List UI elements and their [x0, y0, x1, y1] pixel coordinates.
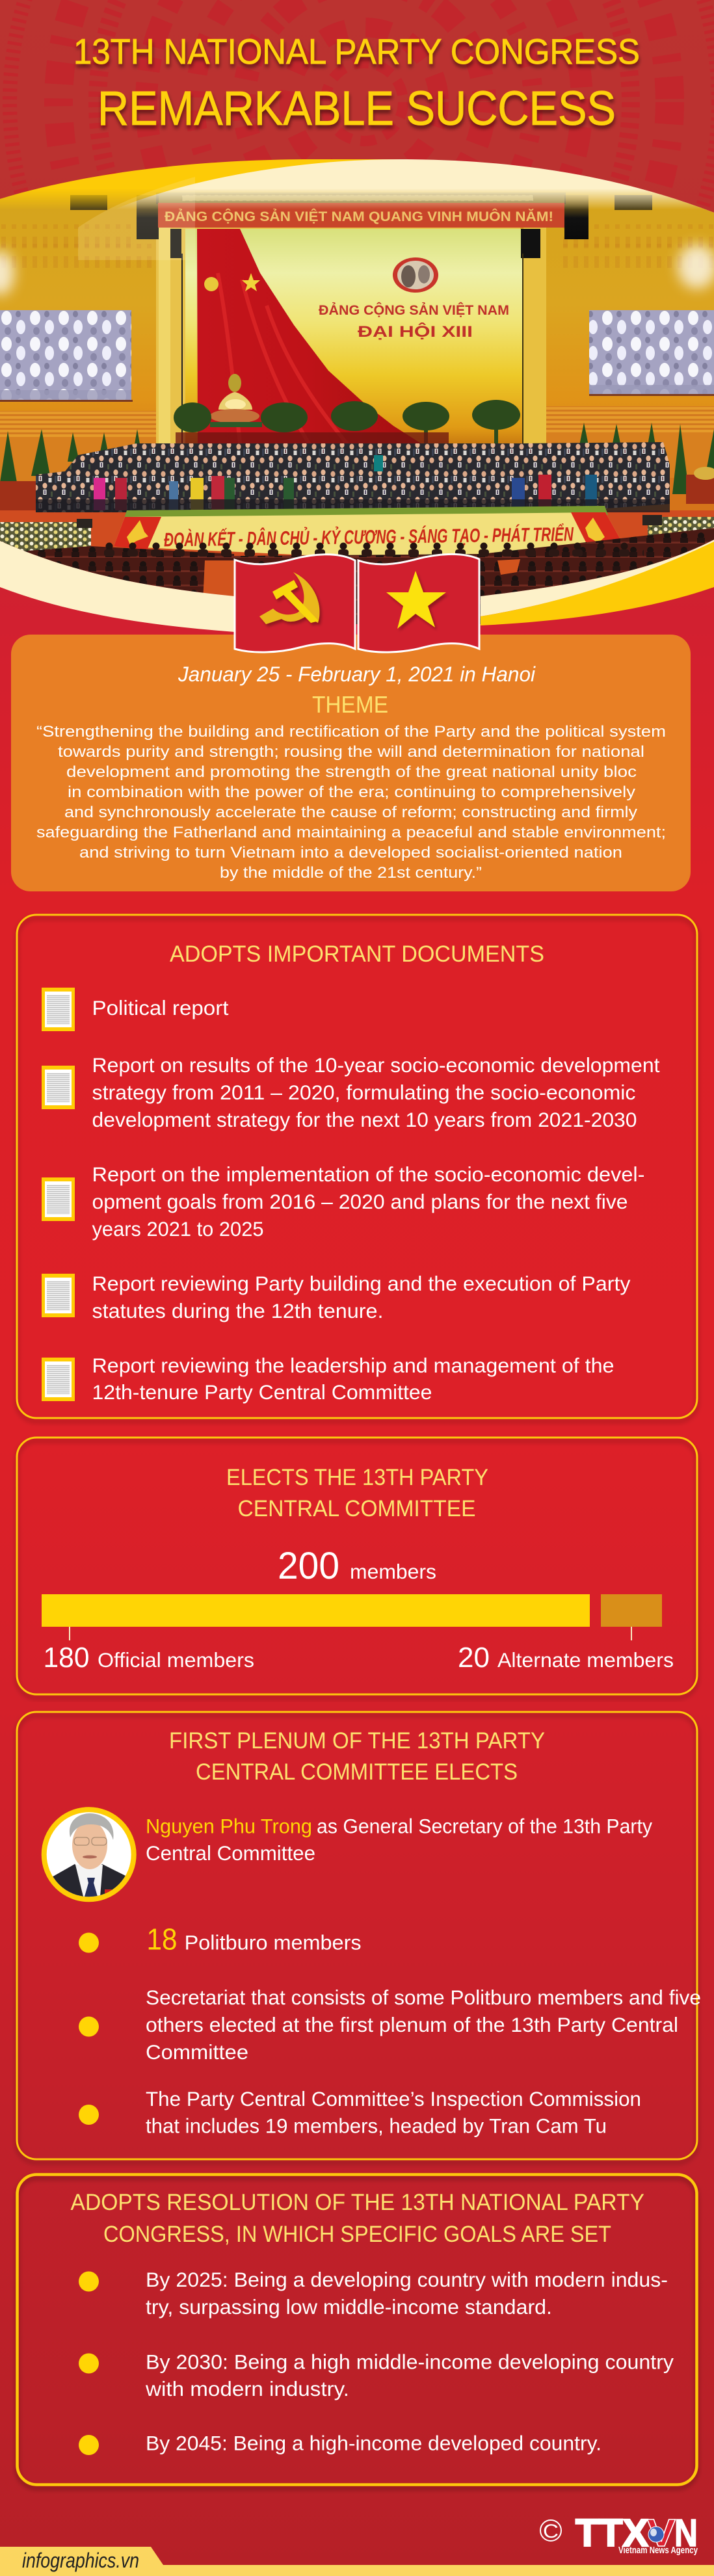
item: 18 politburo members: 18 [147, 1922, 177, 1956]
item: secretariat: Committee [146, 2040, 248, 2064]
item: general secretary: as General Secretary of the 13th Party [317, 1814, 652, 1837]
theme quote: in combination with the power of the era; continuing to comprehensively [68, 783, 636, 801]
decorative Dong Son drum texture [3, 0, 714, 207]
item: socio-economic strategy report: development strategy for the next 10 years from 2021-2030 [92, 1108, 637, 1131]
heading: CENTRAL COMMITTEE ELECTS [196, 1759, 518, 1785]
goal 2030: By 2030: Being a high middle-income developing country [146, 2350, 674, 2373]
label: alternate members [458, 1642, 674, 1674]
date: January 25 - February 1, 2021 in Hanoi [178, 663, 536, 686]
goal 2025 [146, 2268, 668, 2319]
banner: party slogan [158, 203, 564, 228]
item: secretariat: Secretariat that consists of some Politburo members and five [146, 1986, 701, 2009]
item: party building report: Report reviewing Party building and the execution of Party [92, 1272, 631, 1295]
red drape with flags [197, 229, 429, 449]
label: official members: Official members [98, 1648, 254, 1672]
title: 13TH NATIONAL PARTY CONGRESS [73, 31, 640, 72]
goal 2030 [145, 2350, 674, 2400]
right yellow swoosh [481, 542, 714, 625]
item: five-year plan report [92, 1163, 644, 1241]
site name: infographics.vn [22, 2549, 139, 2572]
theme quote [36, 723, 666, 882]
item: inspection commission [146, 2087, 641, 2138]
item: general secretary: Central Committee [146, 1841, 315, 1865]
item: five-year plan report: years 2021 to 2025 [92, 1217, 264, 1241]
logo: TTXVN Vietnam News Agency: N [674, 2512, 698, 2555]
conical trees [0, 423, 714, 494]
theme quote: by the middle of the 21st century.” [220, 864, 482, 882]
goal 2025: By 2025: Being a developing country with modern indus- [146, 2268, 668, 2291]
item: leadership report: Report reviewing the leadership and management of the [92, 1354, 614, 1377]
delegates standing on stage [36, 442, 670, 512]
panel: resolution goals [17, 2174, 697, 2485]
portrait: Nguyen Phu Trong [44, 1809, 134, 1905]
item: leadership report [92, 1354, 614, 1404]
backdrop emblem and text: ĐẠI HỘI XIII [358, 322, 473, 341]
theme quote: towards purity and strength; rousing the will and determination for national [58, 743, 644, 761]
item: party building report: statutes during the 12th tenure. [92, 1299, 384, 1322]
theme quote: and synchronously accelerate the cause of reform; constructing and firmly [64, 804, 638, 821]
copyright symbol [540, 2520, 561, 2542]
panel: date and theme [11, 635, 691, 891]
panel: adopts important documents [17, 915, 697, 1418]
icon: document [42, 1177, 75, 1221]
item: inspection commission: that includes 19 members, headed by Tran Cam Tu [146, 2114, 607, 2138]
item: secretariat [146, 1986, 701, 2064]
bar: official members [42, 1594, 590, 1627]
item: secretariat: others elected at the first plenum of the 13th Party Central [146, 2013, 678, 2036]
goal 2025: try, surpassing low middle-income standard. [146, 2295, 552, 2319]
banner: party slogan: ĐẢNG CỘNG SẢN VIỆT NAM QUANG VINH MUÔN NĂM! [165, 209, 553, 224]
panel: elects central committee [17, 1438, 697, 1694]
national flag page [358, 554, 479, 652]
heading: CONGRESS, IN WHICH SPECIFIC GOALS ARE SET [103, 2221, 611, 2247]
theme heading: THEME [312, 691, 388, 718]
bullet [79, 2435, 99, 2455]
cream overlay on left of photo [78, 177, 195, 260]
label: official members: 180 [43, 1642, 90, 1674]
left screen [0, 310, 133, 402]
heading [70, 2189, 644, 2247]
label: official members [43, 1642, 254, 1674]
item: five-year plan report: Report on the implementation of the socio-economic devel- [92, 1163, 644, 1186]
item: five-year plan report: opment goals from 2016 – 2020 and plans for the next five [92, 1190, 628, 1213]
label: alternate members: Alternate members [497, 1648, 674, 1672]
heading: ADOPTS RESOLUTION OF THE 13TH NATIONAL PARTY [70, 2189, 644, 2215]
icon: document [42, 988, 75, 1031]
item: socio-economic strategy report: strategy from 2011 – 2020, formulating the socio-economic [92, 1081, 636, 1104]
item: general secretary [146, 1814, 652, 1865]
right cream swoosh [481, 540, 714, 616]
bullet [79, 2105, 99, 2125]
heading: CENTRAL COMMITTEE [238, 1495, 476, 1521]
plants on stage [174, 400, 520, 445]
tick: alternate [631, 1627, 632, 1640]
item: inspection commission: The Party Central Committee’s Inspection Commission [146, 2087, 641, 2110]
icon: document [42, 1358, 75, 1401]
total: 200 members: members [350, 1560, 436, 1583]
title: REMARKABLE SUCCESS [98, 81, 616, 135]
goal 2030: with modern industry. [145, 2377, 349, 2400]
logo: TTXVN Vietnam News Agency: V [647, 2512, 676, 2555]
theme quote: safeguarding the Fatherland and maintaining a peaceful and stable environment; [36, 824, 666, 841]
right screen [589, 310, 714, 396]
heading: FIRST PLENUM OF THE 13TH PARTY [169, 1728, 545, 1754]
theme quote: “Strengthening the building and rectification of the Party and the political system [36, 723, 666, 741]
panel: first plenum elects [17, 1712, 701, 2159]
item: 18 politburo members: Politburo members [185, 1931, 362, 1954]
label: alternate members: 20 [458, 1642, 490, 1674]
item: party building report [92, 1272, 631, 1322]
footer strip with site tab [0, 2547, 714, 2576]
logo: TTXVN Vietnam News Agency: TTX [575, 2512, 648, 2555]
heading: ELECTS THE 13TH PARTY [226, 1464, 488, 1490]
item: socio-economic strategy report: Report on results of the 10-year socio-economic development [92, 1053, 660, 1077]
seated audience [0, 528, 714, 624]
icon: document [42, 1066, 75, 1109]
copyright symbol: C [543, 2521, 559, 2542]
item: general secretary: Nguyen Phu Trong [146, 1814, 312, 1837]
heading: ADOPTS IMPORTANT DOCUMENTS [170, 941, 544, 967]
bullet [79, 1932, 99, 1953]
bullet [79, 2017, 99, 2036]
red stage shadow [176, 432, 449, 443]
backdrop emblem and text [319, 257, 509, 341]
total: 200 members: 200 [278, 1545, 339, 1587]
hero photo: congress hall [0, 189, 714, 624]
side audience flowers [0, 515, 714, 551]
Ho Chi Minh bust [210, 374, 262, 427]
theme quote: development and promoting the strength of the great national unity bloc [66, 763, 637, 781]
item: 18 politburo members [147, 1922, 362, 1956]
tick: official [69, 1627, 70, 1640]
title [73, 31, 640, 135]
logo: TTXVN Vietnam News Agency [575, 2512, 698, 2556]
icon: document [42, 1274, 75, 1317]
heading [226, 1464, 488, 1521]
bullet [79, 2272, 99, 2291]
item: political report: Political report [92, 996, 229, 1019]
item: socio-economic strategy report [92, 1053, 660, 1131]
goal 2045: By 2045: Being a high-income developed country. [146, 2432, 602, 2455]
item: leadership report: 12th-tenure Party Central Committee [92, 1380, 432, 1404]
bullet [79, 2354, 99, 2373]
cream dome arc [78, 159, 714, 260]
yellow dome arc [0, 159, 401, 260]
left cream swoosh [0, 541, 235, 632]
bar: alternate members [601, 1594, 662, 1627]
theme quote: and striving to turn Vietnam into a developed socialist-oriented nation [79, 844, 622, 861]
flower strip under delegates [124, 506, 608, 520]
flags: party flag and national flag book [235, 554, 479, 652]
side podiums and floor [0, 467, 714, 556]
party flag page [235, 555, 355, 652]
flower banner: unity slogan [114, 512, 622, 558]
backdrop emblem and text: ĐẢNG CỘNG SẢN VIỆT NAM [319, 302, 509, 318]
heading [169, 1728, 545, 1785]
total: 200 members [278, 1545, 436, 1587]
